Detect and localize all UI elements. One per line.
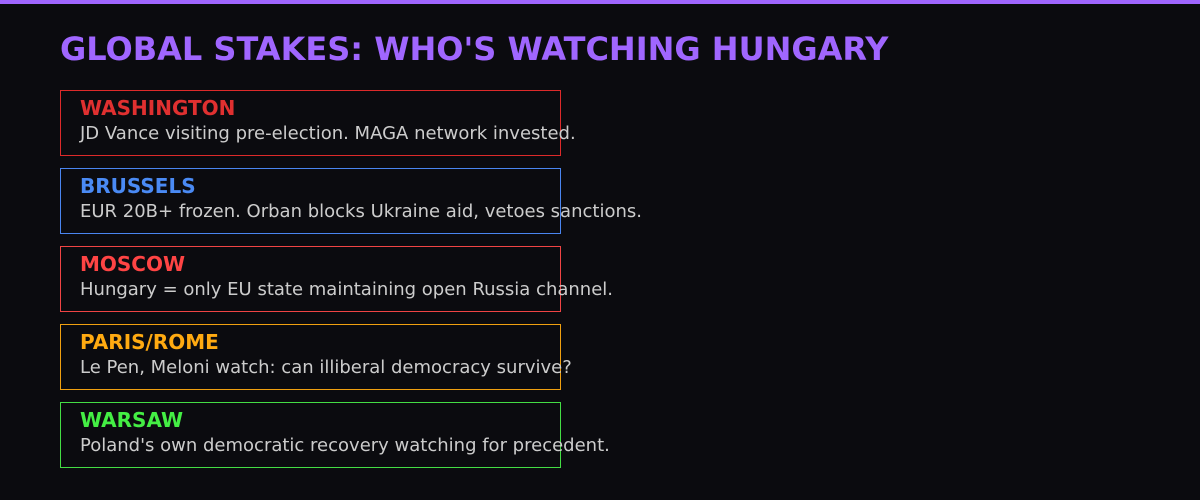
title: GLOBAL STAKES: WHO'S WATCHING HUNGARY bbox=[60, 30, 888, 68]
panel: warsaw: WARSAW bbox=[80, 408, 183, 432]
panel: paris/rome: PARIS/ROME bbox=[80, 330, 219, 354]
panel: brussels: BRUSSELS bbox=[80, 174, 196, 198]
panel: moscow: MOSCOW bbox=[80, 252, 185, 276]
panel: moscow: Hungary = only EU state maintaining open Russia channel. bbox=[80, 279, 613, 300]
panel: brussels bbox=[60, 168, 561, 234]
panel: warsaw: Poland's own democratic recovery watching for precedent. bbox=[80, 435, 610, 456]
panel: washington bbox=[60, 90, 561, 156]
panel: moscow bbox=[60, 246, 561, 312]
panel: washington: WASHINGTON bbox=[80, 96, 235, 120]
panel: washington: JD Vance visiting pre-election. MAGA network invested. bbox=[80, 123, 576, 144]
panel: paris/rome bbox=[60, 324, 561, 390]
panel: warsaw bbox=[60, 402, 561, 468]
panel: brussels: EUR 20B+ frozen. Orban blocks Ukraine aid, vetoes sanctions. bbox=[80, 201, 642, 222]
panel: paris/rome: Le Pen, Meloni watch: can illiberal democracy survive? bbox=[80, 357, 572, 378]
